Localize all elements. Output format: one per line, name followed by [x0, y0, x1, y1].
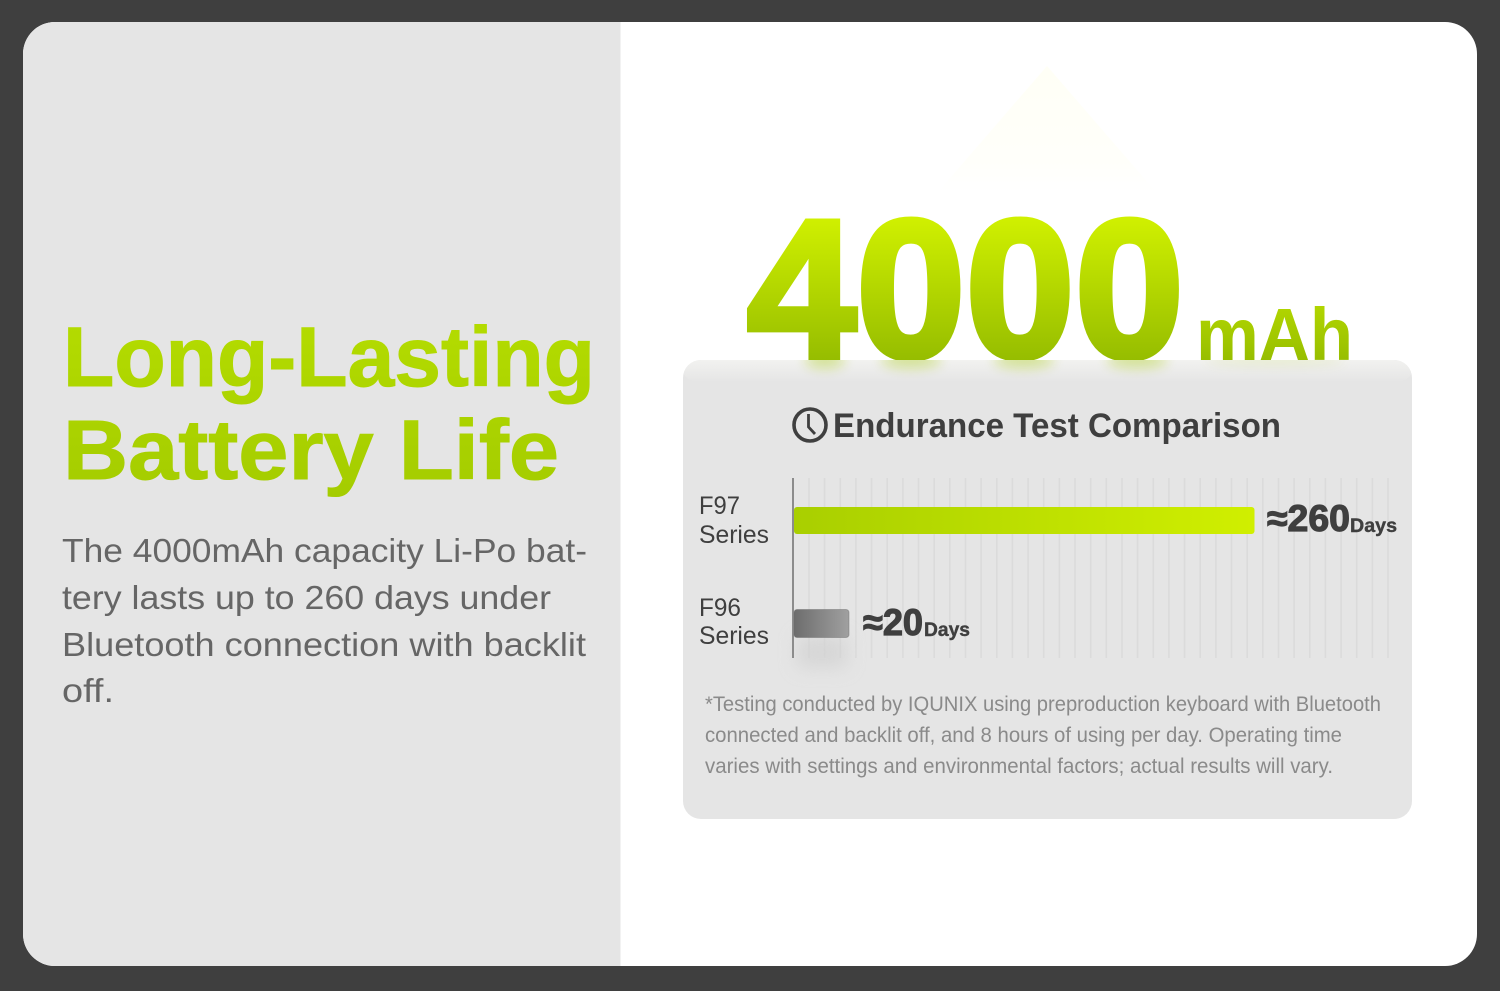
row label: F96 Series: F96: [699, 594, 741, 622]
icon: clock: [794, 409, 826, 441]
row label: F97 Series: F97: [699, 492, 740, 520]
heading: Long-Lasting Battery Life: Long-Lasting: [63, 310, 595, 404]
description text: Bluetooth connection with backlit: [62, 626, 586, 663]
value: 260 days: [1267, 498, 1397, 539]
bar: F97: [794, 507, 1254, 534]
heading: Long-Lasting Battery Life: Battery Life: [63, 403, 559, 497]
row label: F97 Series: [699, 492, 769, 549]
axis: [792, 478, 794, 658]
footnote: varies with settings and environmental factors; actual results will vary.: [705, 755, 1333, 778]
footnote: [705, 693, 1381, 778]
value: 260 days: ≈260: [1267, 498, 1350, 539]
description text: The 4000mAh capacity Li-Po bat-: [62, 532, 587, 569]
grid lines: [809, 478, 1388, 658]
panel: endurance test comparison: [683, 352, 1412, 819]
value: 20 days: [863, 602, 970, 643]
faint triangle glow: [938, 66, 1156, 192]
big number: 4000 mAh: 4000: [747, 179, 1184, 399]
row label: F96 Series: [699, 594, 769, 650]
chart title: Endurance Test Comparison: [833, 407, 1281, 445]
value: 260 days: Days: [1350, 516, 1397, 537]
bar chart: [699, 478, 1397, 668]
bar: F96: [794, 610, 849, 638]
heading: Long-Lasting Battery Life: [63, 310, 595, 497]
row label: F97 Series: Series: [699, 521, 769, 549]
footnote: *Testing conducted by IQUNIX using preproduction keyboard with Bluetooth: [705, 693, 1381, 716]
big number: 4000 mAh: mAh: [1196, 293, 1353, 376]
description text: [62, 532, 587, 709]
glow under digits: [805, 352, 1345, 368]
value: 20 days: ≈20: [863, 602, 923, 643]
shadow under F96 bar: [797, 636, 847, 668]
panel: left description: [23, 22, 620, 966]
footnote: connected and backlit off, and 8 hours of using per day. Operating time: [705, 724, 1342, 747]
row label: F96 Series: Series: [699, 622, 769, 650]
description text: off.: [62, 672, 114, 709]
description text: tery lasts up to 260 days under: [62, 579, 551, 616]
value: 20 days: Days: [924, 620, 970, 641]
